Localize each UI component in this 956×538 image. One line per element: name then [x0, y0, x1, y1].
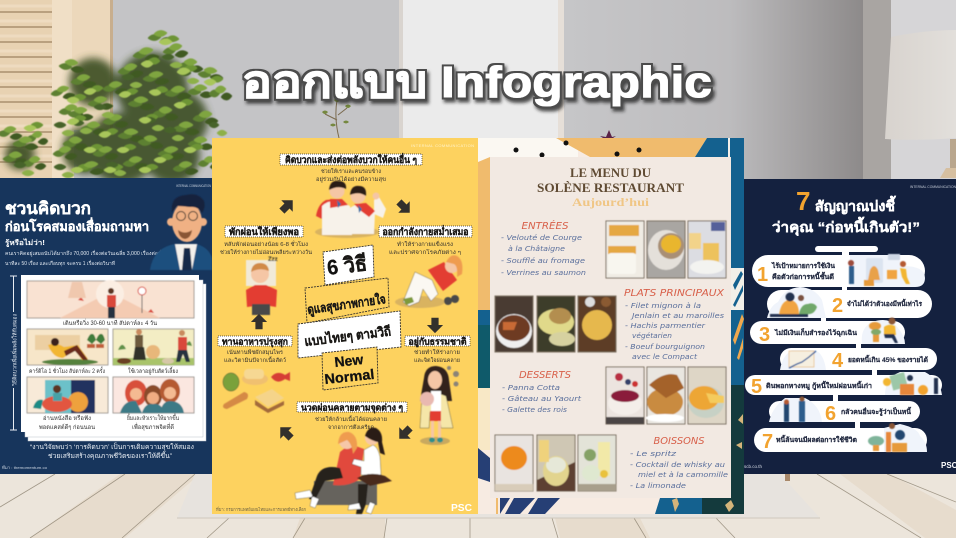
- text block: did you know: [5, 238, 174, 267]
- heading: cooked food: ทานอาหารปรุงสุก: [222, 336, 288, 348]
- caption: read or listen: อ่านหนังสือ หรือฟัง: [43, 414, 91, 422]
- text: exercise details: และปราศจากโรคภัยต่าง ๆ: [389, 248, 461, 256]
- text: exercise details: ทำให้ร่างกายแข็งแรง: [397, 240, 453, 248]
- step 4: 4: [832, 350, 844, 372]
- internal communication tag: INTERNAL COMMUNICATION: [411, 143, 474, 148]
- section: main courses: - Filet mignon à la: [625, 302, 701, 310]
- illustration: cardio at home: [27, 329, 108, 365]
- text: share positive energy details: อยู่ร่วมกันได้อย่างมีความสุข: [316, 176, 386, 183]
- illustration: woman exercising: [395, 255, 462, 308]
- plant: [0, 31, 616, 184]
- caption: read or listen: [39, 414, 95, 431]
- logo: PSC: PSC: [451, 503, 472, 514]
- badge: new normal: [322, 347, 378, 390]
- section: entrees: [501, 219, 586, 277]
- step 2: จำไม่ได้ว่าตัวเองมีหนี้เท่าไร: [847, 298, 922, 308]
- section: main courses: Jenlain et au maroilles: [630, 312, 724, 320]
- quote text: [30, 442, 194, 460]
- heading: massage: นวดผ่อนคลายตามจุดต่าง ๆ: [301, 402, 403, 414]
- heading: positive thinking: ชวนคิดบวก: [5, 199, 91, 218]
- step 3: ไม่มีเงินเก็บสำรองไว้ฉุกเฉิน: [774, 328, 858, 337]
- illustration: stacks of money: [883, 372, 938, 395]
- badge: thai style: [298, 311, 401, 358]
- step 5: [745, 372, 942, 398]
- step 1: ไร้เป้าหมายการใช้เงิน: [771, 261, 836, 270]
- illustration: smiling friends: [113, 377, 194, 413]
- stacked white cards: [21, 275, 206, 441]
- photos: drinks: [495, 435, 616, 491]
- text: massage details: จากอาการตึงเครียด: [328, 424, 374, 431]
- text: share positive energy details: [316, 168, 386, 183]
- illustration: shopping: [848, 254, 910, 286]
- section: drinks: BOISSONS: [654, 436, 705, 447]
- text: rest details: ช่วยให้ร่างกายไม่อ่อนเพลียระหว่างวัน: [220, 249, 312, 256]
- caption: walk or run: เดินหรือวิ่ง 30-60 นาที สัปดาห์ละ 4 วัน: [63, 319, 157, 327]
- step 2: [767, 287, 932, 318]
- source: ที่มา: กรมการแพทย์แผนไทยและการแพทย์ทางเลือก: [216, 506, 306, 512]
- step 7: [754, 423, 927, 453]
- menu title: [537, 166, 685, 209]
- step 3: [750, 318, 905, 346]
- menu title: LE MENU DU: [570, 166, 651, 180]
- step 2: 2: [832, 295, 843, 317]
- badge: six ways: 6 วิธี: [326, 251, 368, 280]
- step 1: คือตัวก่อการหนี้ชั้นดี: [772, 271, 834, 281]
- badge: body and mind: ดูแลสุขภาพกายใจ: [306, 291, 387, 318]
- section: main courses: - Boeuf bourguignon: [625, 343, 705, 351]
- heading: positive thinking: [5, 199, 149, 234]
- source: ที่มา : themomentum.co: [2, 465, 48, 470]
- illustration: girl with flowers: [420, 366, 459, 445]
- caption: pets: ใช้เวลาอยู่กับสัตว์เลี้ยง: [128, 365, 178, 375]
- heading: exercise: ออกกำลังกายสม่ำเสมอ: [382, 224, 469, 238]
- heading: nature: อยู่กับธรรมชาติ: [408, 336, 467, 348]
- step 1: 1: [757, 264, 768, 286]
- vertical caption with bracket: [9, 276, 18, 430]
- menu title: SOLÈNE RESTAURANT: [537, 181, 685, 195]
- title: ออกแบบ Infographic: [242, 58, 712, 107]
- connectors: [815, 246, 878, 429]
- section: desserts: - Galette des rois: [502, 406, 567, 414]
- heading: seven signs: 7: [796, 186, 810, 216]
- step 5: ดินพอกหางหมู กู้หนี้ใหม่ผ่อนหนี้เก่า: [766, 380, 872, 391]
- heading: seven signs: สัญญาณบ่งชี้: [815, 195, 896, 215]
- photos: entrees: [606, 221, 726, 278]
- panel: left poster positive thinking: [0, 178, 212, 474]
- heading: seven signs: ว่าคุณ “ก่อหนี้เกินตัว!”: [772, 216, 920, 236]
- illustration: two friends: [315, 181, 386, 238]
- badge: body and mind: [305, 278, 389, 323]
- step 6: 6: [825, 403, 836, 425]
- text block: did you know: รู้หรือไม่ว่า!: [5, 238, 45, 248]
- section: desserts: [502, 370, 581, 414]
- arrow: top right: [393, 196, 415, 218]
- photos: mains: [495, 296, 616, 352]
- section: main courses: végétarien: [632, 332, 672, 340]
- quote text: ช่วยเสริมสร้างคุณภาพชีวิตของเราให้ดีขึ้น”: [48, 451, 172, 460]
- wooden shutter: [0, 0, 113, 178]
- illustration: reading and podcast: [27, 377, 108, 413]
- section: main courses: PLATS PRINCIPAUX: [624, 288, 725, 299]
- section: drinks: miel et à la camomille: [638, 471, 728, 479]
- vertical caption with bracket: วิธีคิดบวกเพื่อเพิ่มพลังให้กับสมอง: [10, 314, 18, 387]
- text: nature details: ช่วยทำให้ร่างกาย: [414, 349, 460, 356]
- text: rest details: [220, 240, 312, 256]
- text: nature details: และจิตใจผ่อนคลาย: [414, 357, 460, 364]
- illustration: two people: [784, 396, 805, 422]
- section: drinks: - La limonade: [630, 482, 686, 490]
- text block: did you know: นาทีละ 50 เรื่อง และเกือบทุก จะครบ 1 เรื่องต่อวินาที: [5, 260, 115, 267]
- panel: yellow poster six ways: [212, 138, 478, 514]
- section: entrees: - Verrines au saumon: [501, 269, 586, 277]
- caption: smile and laugh: [127, 412, 179, 431]
- illustration: food: [223, 369, 290, 413]
- text: cooked food details: และวิตามินบีจากเนื้อสัตว์: [224, 356, 286, 364]
- arrow: bottom left: [275, 422, 297, 444]
- section: main courses: [624, 288, 725, 361]
- step 7: 7: [762, 431, 773, 453]
- text: massage details: [315, 415, 387, 431]
- wooden floor and rug: [0, 474, 956, 538]
- illustration: worried person: [770, 292, 817, 317]
- photos: desserts: [606, 367, 726, 424]
- arrow: bottom right: [394, 422, 416, 444]
- step 4: [780, 348, 937, 372]
- arrow: top left: [276, 195, 298, 217]
- icon: thinking man with glasses: [150, 194, 212, 270]
- caption: smile and laugh: เพื่อสุขภาพจิตที่ดี: [132, 423, 174, 431]
- section: desserts: - Panna Cotta: [502, 384, 560, 392]
- section: entrees: - Velouté de Courge: [501, 234, 582, 242]
- source: scb.co.th: [744, 464, 763, 469]
- caption: smile and laugh: ยิ้มและหัวเราะให้มากขึ้น: [127, 412, 179, 422]
- illustration: stressed person: [869, 318, 898, 343]
- illustration: two women massage: [295, 428, 392, 514]
- caption: cardio: คาร์ดิโอ 1 ชั่วโมง สัปดาห์ละ 2 ครั้ง: [29, 365, 105, 375]
- illustration: debtor with plant: [868, 423, 907, 452]
- section: main courses: avec le Compact: [632, 353, 697, 361]
- heading: positive thinking: ก่อนโรคสมองเสื่อมถามหา: [5, 217, 149, 234]
- text: massage details: ช่วยให้กล้ามเนื้อได้ผ่อนคลาย: [315, 415, 387, 423]
- badge: six ways: [323, 245, 374, 285]
- illustration: sleeping man: [246, 257, 278, 315]
- text: exercise details: [389, 240, 461, 256]
- section: entrees: à la Châtaigne: [508, 245, 565, 253]
- text: nature details: [414, 349, 460, 364]
- step 6: กลัวคนอื่นจะรู้ว่าเป็นหนี้: [841, 406, 912, 417]
- badge: thai style: แบบไทยๆ ตามวิถี: [303, 322, 392, 349]
- step 5: 5: [751, 376, 762, 398]
- text: cooked food details: เน้นทานพืชผักสมุนไพร: [227, 349, 283, 356]
- section: drinks: - Le spritz: [630, 450, 676, 458]
- menu title: Aujourd’hui: [572, 195, 650, 209]
- section: drinks: - Cocktail de whisky au: [630, 461, 726, 469]
- caption: read or listen: พอดแคสต์ดีๆ ก่อนนอน: [39, 423, 95, 431]
- table lamp: [885, 30, 956, 178]
- section: desserts: - Gâteau au Yaourt: [502, 395, 581, 403]
- section: entrees: - Soufflé au fromage: [501, 257, 585, 265]
- text: share positive energy details: ช่วยให้เราและคนรอบข้าง: [321, 168, 381, 175]
- step 4: ยอดหนี้เกิน 45% ของรายได้: [848, 354, 928, 364]
- illustration: rising chart: [789, 351, 816, 368]
- step 1: [752, 254, 925, 287]
- section: drinks: [630, 436, 728, 490]
- step 3: 3: [759, 324, 770, 346]
- internal communication tag: INTERNAL COMMUNICATION: [176, 184, 211, 188]
- panel: right poster seven signs: [744, 179, 956, 474]
- quote text: “งานวิจัยพบว่า ‘การคิดบวก’ เป็นการเติมความสุขให้สมอง: [30, 442, 194, 451]
- text: cooked food details: [224, 349, 286, 364]
- section: main courses: - Hachis parmentier: [625, 322, 706, 330]
- abstract background shapes: [478, 138, 744, 514]
- badge: new normal: New: [334, 351, 364, 370]
- text: rest details: หลับพักผ่อนอย่างน้อย 6-8 ชั่วโมง: [224, 240, 308, 248]
- illustration: time with pets: [113, 329, 194, 365]
- panel: menu poster: [478, 138, 744, 514]
- heading: seven signs: [772, 186, 920, 236]
- text block: did you know: คนเราคิดอยู่เสมอนับได้มากถึง 70,000 เรื่องต่อวันเฉลี่ย 3,000 เรื่องต่อชั่วโมง: [5, 250, 174, 257]
- step 7: หนี้ล้นจนมีผลต่อการใช้ชีวิต: [776, 434, 857, 444]
- arrow: left middle: [251, 314, 267, 329]
- illustration: walking or running: [27, 280, 194, 318]
- illustration: sleeping man: Zzz: [268, 257, 278, 263]
- heading: rest: พักผ่อนให้เพียงพอ: [229, 226, 299, 238]
- badge: new normal: Normal: [324, 366, 375, 387]
- arrow: right middle: [427, 318, 443, 333]
- section: desserts: DESSERTS: [519, 370, 572, 381]
- heading: share positive energy: คิดบวกและส่งต่อพลังบวกให้คนอื่น ๆ: [285, 152, 417, 166]
- section: entrees: ENTRÉES: [522, 219, 569, 232]
- step 6: [769, 396, 920, 425]
